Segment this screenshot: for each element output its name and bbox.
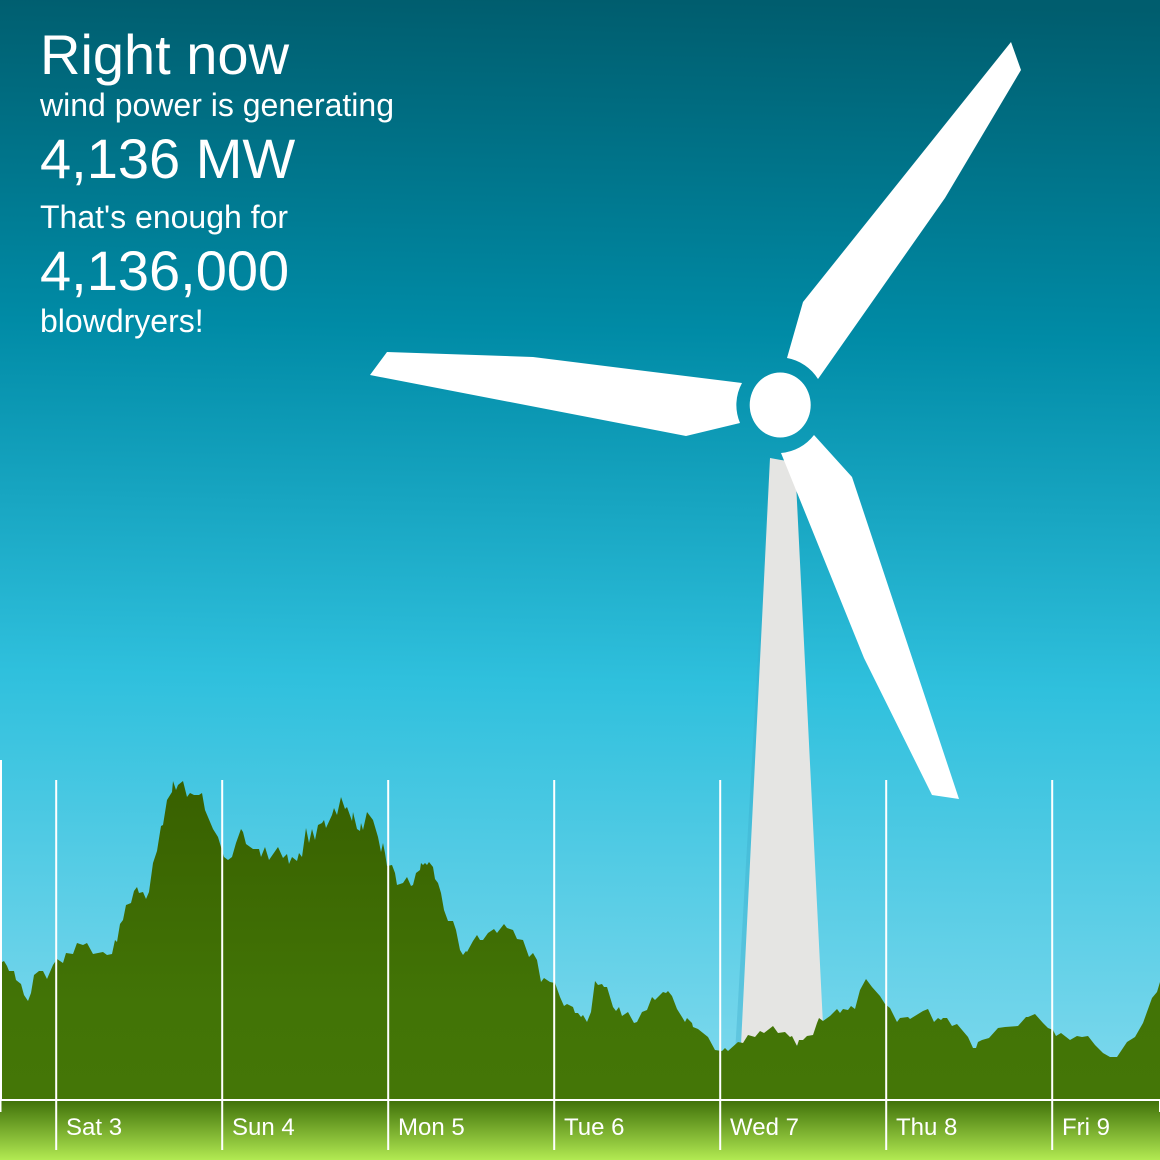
subheading: wind power is generating [39,87,394,123]
day labels: Wed 7 [730,1114,799,1141]
turbine rotor [370,42,1021,799]
comparison intro: That's enough for [40,199,288,235]
day labels [66,1114,1110,1141]
ground band [0,1100,1160,1160]
blade: lower right [781,435,959,799]
day labels: Sun 4 [232,1114,295,1141]
day grid lines [0,760,1053,1150]
blade: upper right [787,42,1021,379]
chart baseline [0,1099,1160,1112]
day labels: Thu 8 [896,1114,957,1141]
blade: left [370,352,742,436]
day labels: Fri 9 [1062,1114,1110,1141]
blowdryer figure: 4,136,000 [40,239,289,302]
comparison unit: blowdryers! [40,303,204,339]
headline text block [39,23,394,339]
megawatt figure: 4,136 MW [40,127,295,190]
day labels: Mon 5 [398,1114,465,1141]
hub [750,372,811,438]
day labels: Sat 3 [66,1114,122,1141]
heading: Right now [40,23,290,86]
day labels: Tue 6 [564,1114,624,1141]
turbine tower [741,458,824,1045]
turbine tower shadow [736,458,770,1045]
area chart: wind generation over the week [2,781,1160,1100]
